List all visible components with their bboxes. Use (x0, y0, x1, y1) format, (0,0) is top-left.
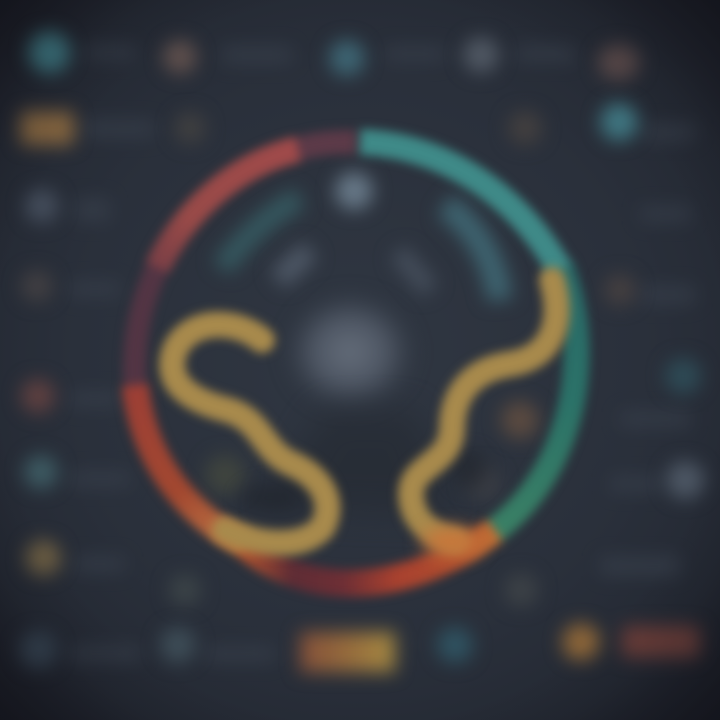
icon: slate bottom left (19, 631, 57, 669)
icon: orange and yellow label (300, 632, 395, 672)
small top node (335, 172, 373, 210)
icon: brown top right (598, 44, 640, 80)
ring: bottom (245, 530, 495, 583)
icon: grey top (463, 37, 499, 73)
icons: faint inner (169, 111, 542, 607)
icon: orange label (20, 111, 74, 145)
icon: amber left (25, 540, 61, 576)
icon: teal left (24, 455, 58, 489)
small amber accent (501, 401, 539, 439)
icon: teal top centre (329, 40, 365, 76)
ring: maroon top (298, 142, 356, 149)
dark lower centre (265, 410, 450, 515)
icon: faint brown right (604, 274, 636, 306)
ring: maroon left (135, 268, 157, 385)
icon: dim teal right (665, 358, 701, 394)
faint list text bars (70, 44, 695, 662)
small olive accent (205, 455, 245, 495)
icon: grey-blue right (666, 461, 704, 499)
icon: brown left (21, 270, 53, 302)
icon: teal top left (28, 31, 70, 73)
ring: red upper left (157, 149, 298, 268)
icon column: left (19, 111, 74, 669)
orange junction (422, 528, 482, 556)
ring: green right (495, 265, 577, 530)
ring: red-orange lower left (135, 385, 245, 545)
icon: teal right (600, 103, 638, 141)
icon: orange top (163, 40, 197, 74)
inner grey dash left (278, 250, 310, 280)
yellow snake right (411, 280, 557, 540)
icon: blue bottom (160, 627, 196, 663)
ring (135, 142, 577, 583)
inner teal arc right (445, 205, 500, 300)
icon: red left (21, 379, 55, 413)
dark halo inside snake loops (240, 450, 488, 512)
inner grey dash right (398, 252, 430, 290)
inner teal arc left (222, 198, 300, 268)
yellow snake left (172, 325, 327, 543)
icon: teal bottom (437, 627, 473, 663)
small grey accent (466, 466, 500, 500)
icon: red label (622, 626, 700, 658)
icon row: bottom (160, 623, 700, 672)
icon: slate left (25, 189, 59, 223)
ring: teal top right (360, 142, 560, 270)
icon column: right (600, 103, 704, 499)
central blob (282, 290, 418, 414)
icon: orange bottom (562, 623, 600, 661)
icon row: top (28, 31, 640, 80)
